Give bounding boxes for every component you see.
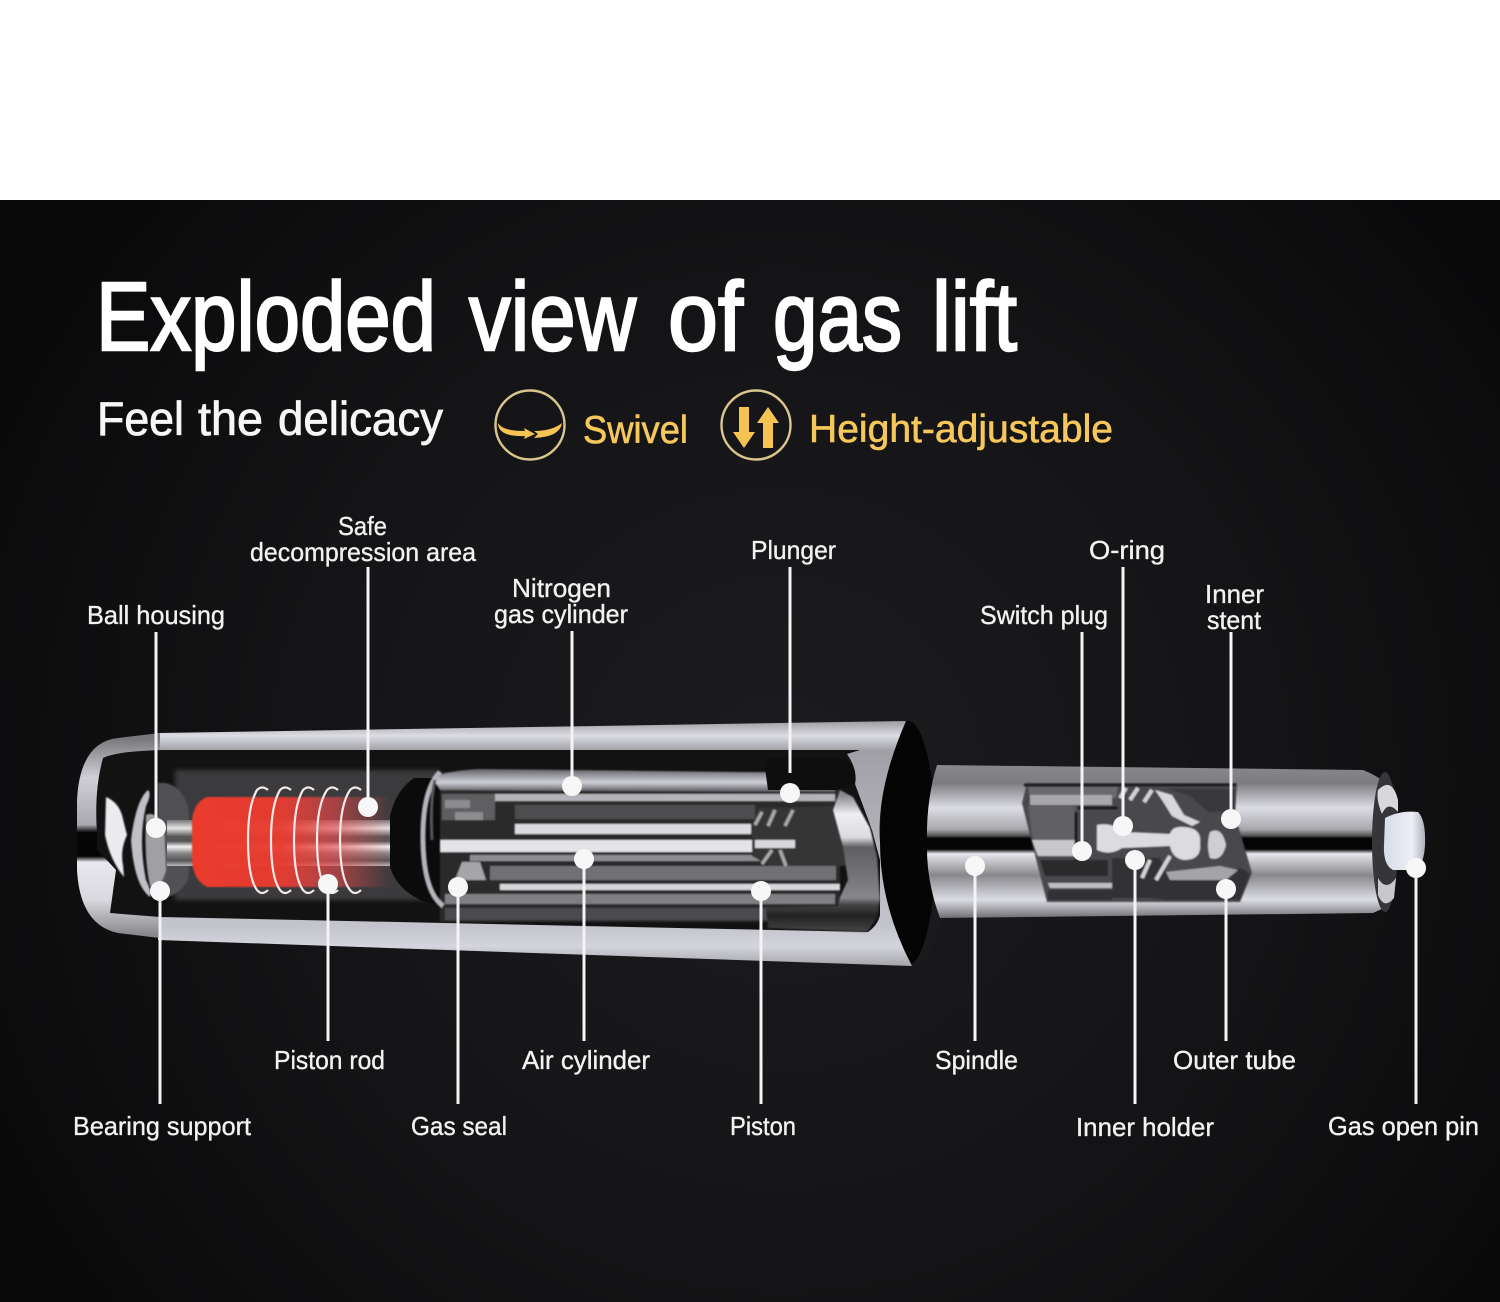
subtitle: Feel — [97, 392, 184, 445]
callout: nitrogen gas cylinder: gas cylinder — [494, 599, 628, 629]
title: of — [668, 262, 744, 371]
callout: plunger — [751, 535, 836, 803]
black gas seal block — [390, 778, 445, 905]
spindle rod — [927, 765, 1398, 918]
silver piston wedge — [766, 790, 880, 932]
label: height-adjustable: Height-adjustable — [809, 408, 1113, 451]
callout: nitrogen gas cylinder: Nitrogen — [512, 573, 611, 603]
callout: plunger: Plunger — [751, 535, 836, 565]
callout: bearing support — [73, 881, 252, 1141]
plunger block — [765, 758, 855, 790]
subtitle: the — [198, 392, 263, 445]
callout: inner stent — [1205, 579, 1264, 829]
gas open pin — [1384, 812, 1425, 870]
callout: switch plug — [980, 600, 1108, 861]
callout: inner stent: stent — [1207, 605, 1262, 635]
callout: air cylinder: Air cylinder — [522, 1045, 650, 1075]
callout: gas seal: Gas seal — [411, 1111, 507, 1141]
callout: inner holder: Inner holder — [1076, 1112, 1214, 1142]
callout: safe decompression area: Safe — [338, 511, 387, 541]
title: view — [469, 262, 637, 371]
callout: spindle: Spindle — [935, 1045, 1018, 1075]
title: gas — [773, 262, 902, 371]
label: swivel: Swivel — [583, 409, 688, 452]
callout: piston rod — [274, 874, 385, 1075]
spindle cutaway window — [1022, 783, 1252, 902]
black seal ring — [880, 721, 948, 965]
callout: ball housing: Ball housing — [87, 600, 225, 630]
callout: ball housing — [87, 600, 225, 838]
callout: o-ring — [1089, 535, 1165, 836]
callout: safe decompression area: decompression area — [250, 537, 477, 567]
air cylinder assembly — [423, 769, 848, 922]
callout: piston — [730, 881, 796, 1141]
callout: gas seal — [411, 877, 507, 1141]
white top margin — [0, 0, 1500, 200]
red decompression zone — [192, 797, 392, 887]
callout: air cylinder — [522, 849, 650, 1075]
callout: o-ring: O-ring — [1089, 535, 1165, 565]
callout: gas open pin — [1328, 858, 1479, 1141]
callout: inner stent: Inner — [1205, 579, 1264, 609]
bearing and ball housing — [105, 783, 190, 897]
title: Exploded — [96, 262, 436, 371]
callout: outer tube: Outer tube — [1173, 1045, 1296, 1075]
callout: outer tube — [1173, 879, 1296, 1075]
callout: piston: Piston — [730, 1111, 796, 1141]
subtitle: delicacy — [278, 392, 443, 445]
callout: spindle — [935, 856, 1018, 1075]
callout: inner holder — [1076, 850, 1214, 1142]
gas lift illustration — [77, 721, 1425, 966]
cutaway interior — [96, 750, 880, 932]
inner grey chamber — [175, 770, 440, 900]
icon: height adjustable — [722, 390, 790, 460]
outer cylinder body — [158, 721, 912, 966]
callout: nitrogen gas cylinder — [494, 573, 628, 796]
title: lift — [932, 262, 1017, 371]
piston shaft — [167, 820, 397, 866]
callout: piston rod: Piston rod — [274, 1045, 385, 1075]
icon: swivel — [496, 390, 564, 460]
coil spring — [248, 788, 361, 893]
callout: switch plug: Switch plug — [980, 600, 1108, 630]
callout: bearing support: Bearing support — [73, 1111, 252, 1141]
callout: gas open pin: Gas open pin — [1328, 1111, 1479, 1141]
callout: safe decompression area — [250, 511, 477, 817]
bottom cap — [77, 733, 160, 938]
